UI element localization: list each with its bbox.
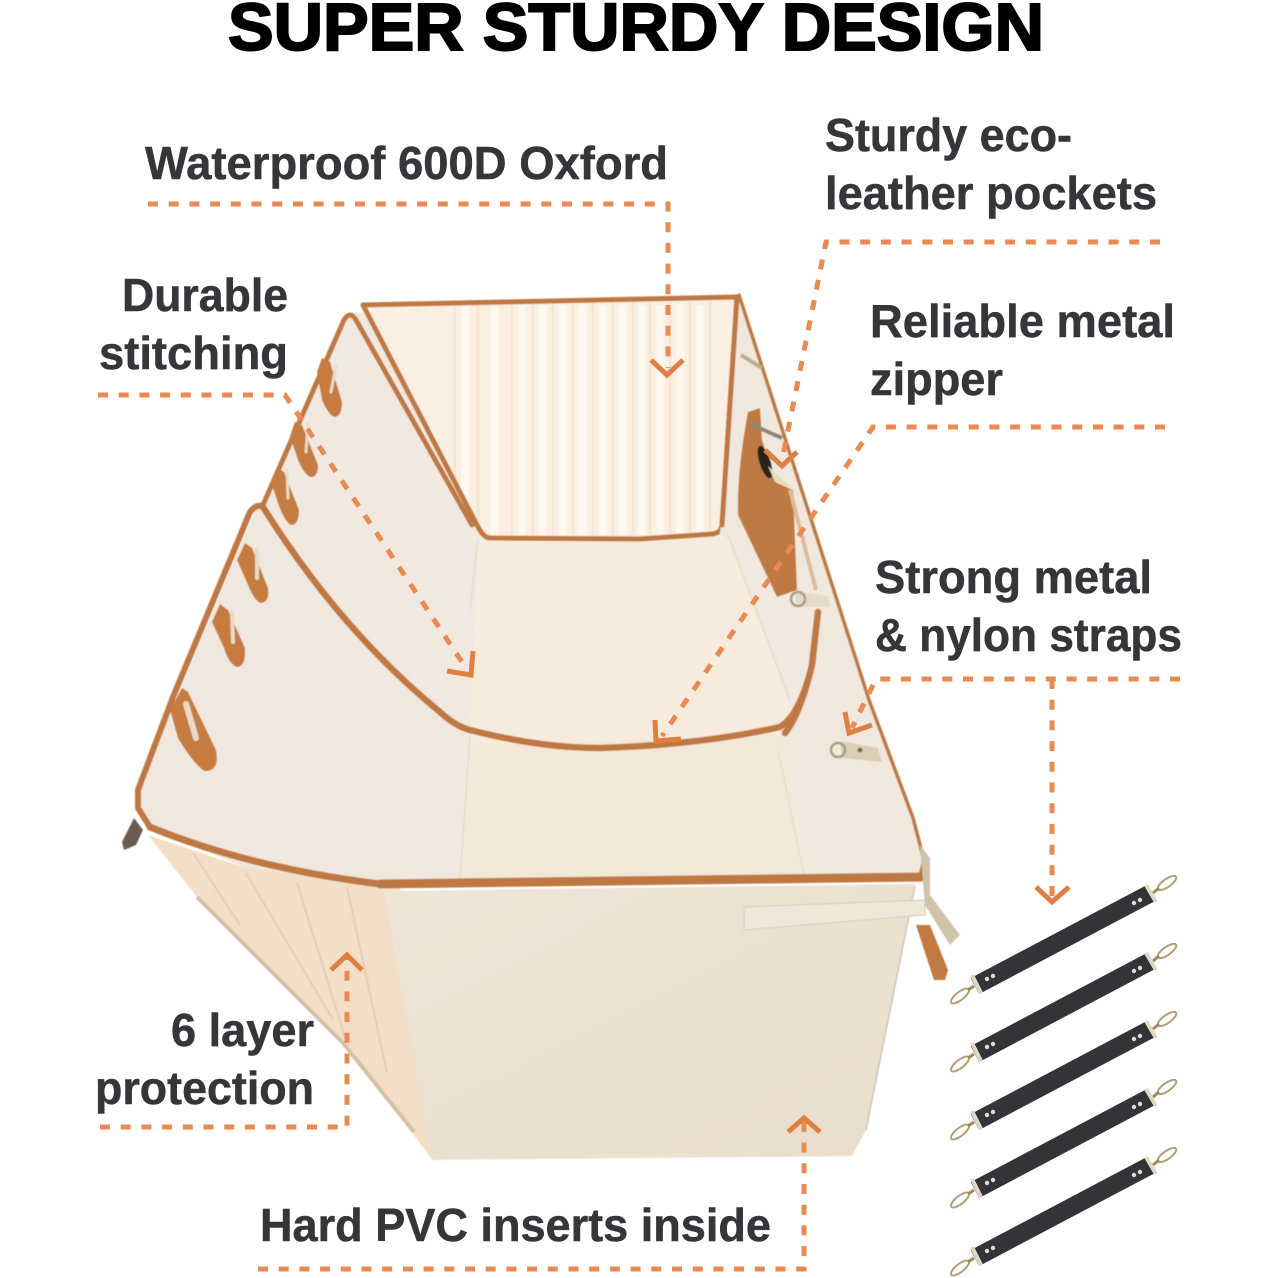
callout: Durable stitching: stitching [99,327,288,379]
callout: Strong metal and nylon straps [845,551,1182,902]
callout: Sturdy eco-leather pockets: leather pockets [825,167,1157,219]
callout: Waterproof 600D Oxford [145,137,683,375]
callout: Hard PVC inserts inside [258,1118,820,1269]
left pleated side panel [148,835,440,1160]
floor seams [460,535,805,880]
lower left wing [138,506,470,884]
callout: Durable stitching: Durable [122,269,288,321]
callout: Reliable metal zipper [655,295,1175,741]
left corner hardware [122,818,143,850]
front top piping [150,827,380,884]
callout: Reliable metal zipper: Reliable metal [870,295,1175,347]
front box panel [384,884,915,1160]
upper left wing [263,313,478,730]
callout: Sturdy eco-leather pockets: Sturdy eco- [825,109,1072,161]
handle strap [744,900,925,930]
back wall [363,297,737,539]
pocket [738,408,797,597]
right wing [720,295,924,880]
strap tabs on lower wing [237,543,268,603]
callout: Strong metal and nylon straps: Strong metal [875,551,1152,603]
right corner hardware [916,845,960,980]
straps: five black nylon straps [949,873,1178,1278]
strap tabs on upper wing [317,358,342,417]
callout: Strong metal and nylon straps: & nylon straps [875,609,1182,661]
product: car seat cover [122,295,960,1160]
callout: Waterproof 600D Oxford: Waterproof 600D Oxford [145,137,668,189]
interior base [138,295,924,884]
callout: Reliable metal zipper: zipper [870,353,1003,405]
seat divider piping [263,507,818,748]
floor [460,533,805,882]
callout: Hard PVC inserts inside: Hard PVC inserts inside [260,1199,771,1251]
metal buckle hardware [741,355,882,762]
callout: Sturdy eco-leather pockets [765,109,1160,466]
callout: 6 layer protection [95,955,362,1127]
callout: Durable stitching [98,269,473,675]
callout: 6 layer protection: 6 layer [171,1004,314,1056]
callout: 6 layer protection: protection [95,1062,314,1114]
